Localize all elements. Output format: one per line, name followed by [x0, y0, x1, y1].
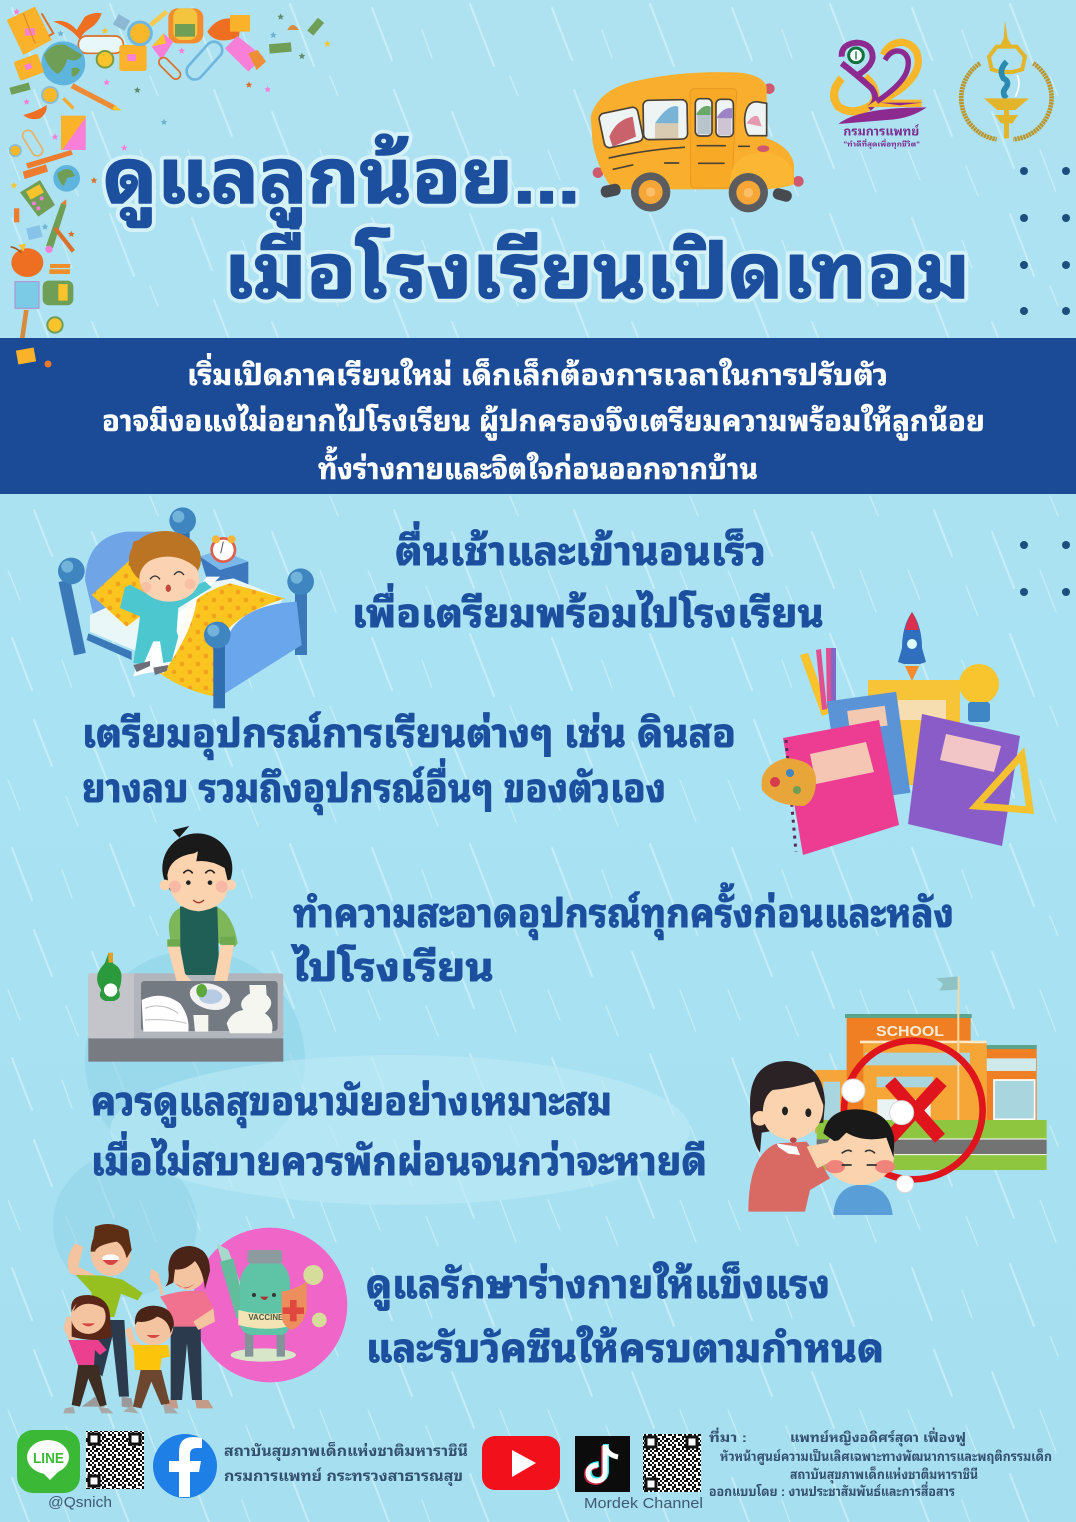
- text: vaccines: [366, 1262, 884, 1371]
- band: intro text: [0, 338, 1076, 494]
- band: intro text: อาจมีงอแงไม่อยากไปโรงเรียน ผู้ปกครองจึงเตรียมความพร้อมให้ลูกน้อย: [102, 403, 985, 441]
- icon: man washing dishes: [88, 826, 283, 1062]
- text: clean supplies: ทำความสะอาดอุปกรณ์ทุกครั้งก่อนและหลัง: [293, 883, 954, 940]
- band: intro text: เริ่มเปิดภาคเรียนใหม่ เด็กเล็กต้องการเวลาในการปรับตัว: [187, 353, 888, 392]
- text: wake early: เพื่อเตรียมพร้อมไปโรงเรียน: [352, 583, 824, 636]
- text: prepare supplies: ยางลบ รวมถึงอุปกรณ์อื่นๆ ของตัวเอง: [82, 758, 666, 815]
- title: [103, 134, 970, 315]
- footer: tiktok and qr: [575, 1434, 703, 1512]
- title: ดูแลลูกน้อย...: [103, 134, 580, 228]
- footer: line contact: [17, 1430, 144, 1511]
- footer: institute text: สถาบันสุขภาพเด็กแห่งชาติมหาราชินี: [224, 1440, 468, 1462]
- footer: youtube: [482, 1436, 560, 1490]
- logo: 82 department of medical services: "ทำดีที่สุดเพื่อทุกชีวิต": [843, 139, 920, 150]
- icon: sick child and school: SCHOOL: [876, 1024, 944, 1040]
- footer: source credits: หัวหน้าศูนย์ความเป็นเลิศเฉพาะทางพัฒนาการและพฤติกรรมเด็ก: [720, 1447, 1052, 1466]
- icon: family and vaccine: [63, 1224, 347, 1413]
- icon: school books and rocket: [762, 612, 1030, 855]
- icon: family and vaccine: VACCINE: [248, 1312, 284, 1322]
- text: hygiene: [91, 1081, 707, 1184]
- icon: child in bed: [58, 507, 314, 708]
- text: clean supplies: [291, 883, 954, 990]
- logo: 82 department of medical services: กรมการแพทย์: [843, 124, 919, 139]
- icon: school bus: [591, 72, 804, 212]
- text: wake early: ตื่นเช้าและเข้านอนเร็ว: [395, 521, 766, 574]
- logo: 82 department of medical services: [834, 42, 927, 150]
- title: เมื่อโรงเรียนเปิดเทอม: [224, 213, 970, 315]
- text: clean supplies: ไปโรงเรียน: [291, 945, 494, 990]
- text: prepare supplies: [82, 712, 736, 815]
- footer: facebook: [153, 1434, 217, 1498]
- footer: line contact: LINE: [33, 1450, 64, 1467]
- footer: source credits: ที่มา :: [709, 1427, 747, 1445]
- band: intro text: ทั้งร่างกายและจิตใจก่อนออกจากบ้าน: [318, 445, 758, 486]
- supply stars over band: [16, 348, 52, 368]
- footer: source credits: [709, 1427, 1052, 1499]
- footer: source credits: แพทย์หญิงอดิศร์สุดา เฟื่องฟู: [790, 1427, 966, 1447]
- icon: sick child and school: [748, 976, 1047, 1215]
- footer: source credits: สถาบันสุขภาพเด็กแห่งชาติมหาราชินี: [790, 1465, 978, 1484]
- footer: institute text: [224, 1440, 468, 1487]
- footer: institute text: กรมการแพทย์ กระทรวงสาธารณสุข: [224, 1466, 463, 1487]
- decorative dot column: [1020, 167, 1070, 596]
- text: vaccines: ดูแลรักษาร่างกายให้แข็งแรง: [366, 1262, 830, 1310]
- title: ดูแลลูกน้อย...: [103, 134, 580, 228]
- footer: line contact: @Qsnich: [48, 1494, 112, 1511]
- school supplies corner decoration: [7, 7, 331, 343]
- footer: tiktok and qr: Mordek Channel: [584, 1495, 703, 1512]
- title: เมื่อโรงเรียนเปิดเทอม: [224, 213, 970, 315]
- text: vaccines: และรับวัคซีนให้ครบตามกำหนด: [366, 1326, 884, 1371]
- text: hygiene: ควรดูแลสุขอนามัยอย่างเหมาะสม: [91, 1081, 612, 1128]
- logo: royal crest: [961, 20, 1052, 139]
- footer: source credits: ออกแบบโดย : งานประชาสัมพันธ์และการสื่อสาร: [709, 1481, 955, 1499]
- text: wake early: [352, 521, 824, 636]
- text: prepare supplies: เตรียมอุปกรณ์การเรียนต่างๆ เช่น ดินสอ: [82, 712, 736, 760]
- text: hygiene: เมื่อไม่สบายควรพักผ่อนจนกว่าจะหายดี: [91, 1131, 707, 1184]
